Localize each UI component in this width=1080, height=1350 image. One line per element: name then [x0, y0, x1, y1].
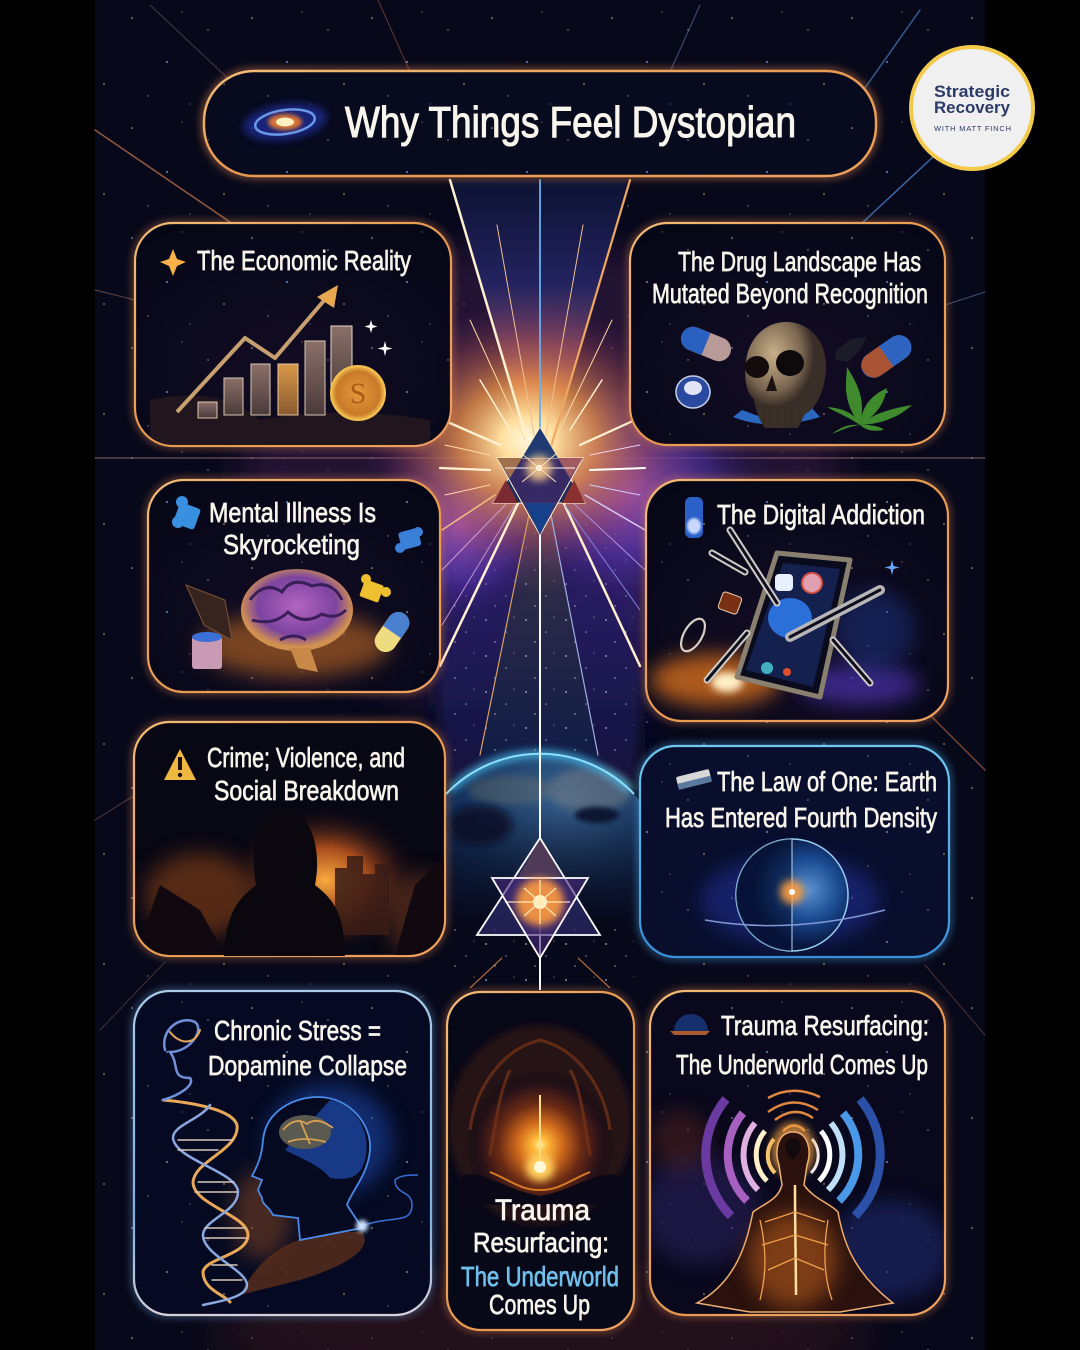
fire glow [650, 590, 920, 706]
heading: Resurfacing: [473, 1227, 609, 1258]
sparkles [884, 560, 900, 575]
central vertical beam [536, 530, 544, 990]
icon: blue capsule badge [685, 497, 703, 538]
heading: Has Entered Fourth Density [665, 802, 937, 833]
scene: glowing cave [448, 1025, 632, 1225]
panel: the drug landscape [630, 223, 945, 445]
icon: split globe [700, 839, 885, 951]
logo name: Recovery [934, 99, 1011, 117]
heading: The Economic Reality [197, 245, 411, 276]
icon: glowing brain [200, 569, 390, 677]
heading: The Underworld [461, 1261, 619, 1292]
title banner [204, 71, 876, 176]
icon: blue red capsule [856, 330, 916, 383]
icon: blue white capsule [677, 323, 735, 365]
icon: yellow puzzle piece [359, 574, 391, 603]
outer background rays [95, 0, 985, 1035]
heading: The Digital Addiction [717, 499, 925, 530]
figure: hooded silhouette [224, 810, 345, 956]
panel: the underworld comes up [640, 991, 950, 1315]
heading [209, 497, 376, 560]
heading [461, 1194, 619, 1320]
heading: The Underworld Comes Up [676, 1049, 928, 1080]
figure: meditating body [697, 1122, 893, 1312]
icon: warning triangle [164, 749, 196, 780]
panel: trauma resurfacing cave [447, 992, 634, 1330]
heading [676, 1010, 929, 1080]
logo tagline: WITH MATT FINCH [934, 124, 1011, 133]
icon: spark [160, 249, 186, 276]
panel: the law of one [640, 746, 949, 957]
panel: crime violence social breakdown [134, 722, 455, 957]
icon: blue puzzle piece right [395, 527, 423, 553]
panel: the economic reality [135, 223, 451, 446]
icon: glass ball [676, 376, 710, 408]
heading: The Law of One: Earth [717, 766, 937, 797]
heading [207, 742, 405, 806]
icon: helmet dome [670, 1014, 710, 1035]
heading: Social Breakdown [214, 775, 399, 806]
icon: scroll [676, 769, 712, 790]
planet earth [405, 754, 675, 1014]
panel: mental illness [148, 480, 440, 692]
icon: pill cup [192, 632, 222, 669]
heading: Crime; Violence, and [207, 742, 405, 773]
icon: blue puzzle piece [172, 496, 201, 530]
icon: skull [733, 322, 826, 428]
heading: Comes Up [489, 1289, 590, 1320]
graphic: energy arcs [706, 1091, 880, 1216]
heading: Chronic Stress = [214, 1015, 381, 1046]
lower star tetrahedron symbol [470, 838, 610, 988]
chart: rising bars and arrow [150, 285, 430, 445]
heading: Trauma [495, 1194, 590, 1227]
scene: burning city [135, 808, 455, 957]
upper star tetrahedron symbol [493, 428, 585, 535]
heading: Why Things Feel Dystopian [345, 98, 796, 147]
logo badge [911, 47, 1033, 169]
heading [208, 1015, 407, 1081]
figure: head silhouette [232, 1085, 418, 1295]
icon: capsule [370, 608, 414, 656]
icon: dna helix [163, 1020, 248, 1305]
heading: Dopamine Collapse [208, 1050, 407, 1081]
central light beams and wedges [360, 180, 780, 790]
heading [665, 766, 937, 833]
heading: Mutated Beyond Recognition [652, 278, 928, 309]
icon: leaf shard [186, 585, 232, 640]
heading [652, 246, 928, 309]
heading: Skyrocketing [223, 529, 360, 560]
logo name [934, 83, 1011, 117]
heading: Mental Illness Is [209, 497, 376, 528]
icon: chained smartphone [676, 530, 880, 697]
icon: coin [331, 366, 385, 420]
icon: coin: S [350, 377, 366, 410]
icon: spiral galaxy [241, 98, 329, 146]
sparkles [364, 320, 392, 356]
scene: nebula clouds [640, 1110, 950, 1300]
icon: cannabis leaf [827, 367, 912, 434]
logo name: Strategic [934, 83, 1010, 101]
icon: dark stones [835, 337, 867, 362]
panel: chronic stress dopamine collapse [134, 991, 431, 1315]
panel: the digital addiction [646, 480, 948, 721]
heading: Trauma Resurfacing: [721, 1010, 929, 1041]
heading: The Drug Landscape Has [678, 246, 921, 277]
